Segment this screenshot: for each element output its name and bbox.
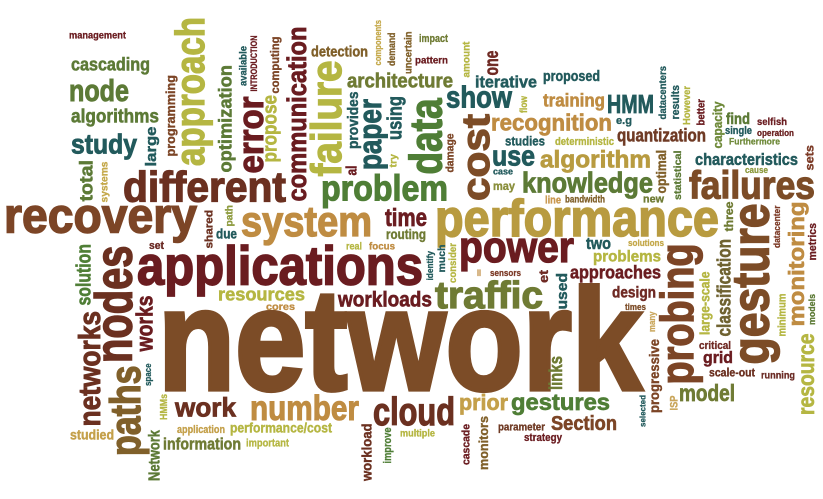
word: monitors: monitors	[476, 416, 491, 470]
word: studies: studies	[505, 134, 545, 148]
word: works: works	[132, 295, 158, 352]
word: single: single	[725, 125, 752, 137]
word: power: power	[459, 223, 574, 272]
word: optimization: optimization	[216, 65, 236, 172]
word: iterative: iterative	[475, 72, 537, 92]
word: solutions: solutions	[628, 238, 664, 249]
word: datacenters: datacenters	[657, 66, 669, 120]
word: amount: amount	[460, 41, 472, 78]
word: much: much	[437, 245, 448, 272]
word: total: total	[76, 160, 96, 202]
word: Section: Section	[551, 413, 617, 435]
word: management: management	[69, 30, 127, 42]
word: available: available	[238, 46, 250, 86]
word: selected: selected	[638, 395, 648, 427]
word: network: network	[158, 260, 643, 420]
word: metrics: metrics	[807, 223, 819, 260]
word: applications: applications	[137, 234, 423, 296]
word: workload: workload	[358, 423, 374, 482]
word: strategy: strategy	[524, 432, 563, 444]
word: training: training	[543, 90, 605, 110]
word: classification: classification	[714, 239, 736, 336]
word: recognition: recognition	[491, 110, 612, 136]
word: studied: studied	[70, 426, 114, 442]
word: cascade: cascade	[460, 424, 472, 465]
word: grid: grid	[703, 348, 733, 367]
word: study: study	[71, 128, 137, 160]
word: one: one	[482, 50, 503, 76]
word: datacenter: datacenter	[772, 205, 782, 248]
word: performance/cost: performance/cost	[230, 420, 332, 436]
word: workloads: workloads	[337, 288, 432, 312]
word: proposed: proposed	[543, 68, 600, 85]
word: large: large	[143, 126, 160, 166]
word: real: real	[346, 242, 362, 252]
word: al: al	[344, 166, 360, 176]
word: resources: resources	[218, 284, 305, 304]
word: traffic: traffic	[435, 275, 543, 317]
word: new: new	[643, 194, 664, 206]
word: gesture: gesture	[722, 204, 780, 364]
word: performance: performance	[435, 190, 719, 248]
word: different: different	[123, 164, 286, 212]
word: running: running	[761, 370, 795, 382]
word: progressive: progressive	[646, 339, 662, 413]
word: Furthermore: Furthermore	[729, 136, 780, 148]
word: focus: focus	[369, 242, 395, 252]
word: sets: sets	[802, 145, 816, 170]
word: consider: consider	[447, 243, 459, 283]
word: large-scale: large-scale	[696, 271, 712, 335]
word: flow: flow	[519, 96, 530, 113]
word: many: many	[647, 312, 657, 332]
word: gestures: gestures	[511, 389, 610, 415]
word: recovery: recovery	[4, 190, 197, 244]
word: results: results	[670, 85, 682, 120]
word: operation: operation	[757, 128, 794, 139]
word: may: may	[493, 179, 515, 193]
word: problems: problems	[593, 248, 661, 266]
word: computing: computing	[268, 36, 282, 94]
word: However: However	[681, 86, 693, 125]
word: critical: critical	[699, 340, 731, 352]
word: networks: networks	[72, 311, 107, 426]
word: knowledge: knowledge	[522, 168, 653, 200]
word: programming: programming	[163, 75, 178, 156]
word: damage: damage	[444, 134, 456, 172]
word: node: node	[69, 73, 129, 108]
word: detection: detection	[311, 44, 368, 60]
word: cloud: cloud	[373, 391, 455, 434]
word: uncertain: uncertain	[404, 32, 414, 74]
word: capacity: capacity	[710, 101, 725, 148]
word: set: set	[149, 240, 164, 252]
word: bandwidth: bandwidth	[565, 194, 605, 206]
word: cost: cost	[455, 114, 498, 201]
word: shared: shared	[204, 210, 216, 248]
word: space: space	[143, 364, 153, 386]
word: error: error	[230, 96, 271, 174]
word: impact: impact	[419, 33, 448, 45]
word: HMM: HMM	[607, 89, 654, 119]
word: nodes: nodes	[86, 246, 144, 363]
word: better: better	[696, 98, 708, 126]
word: quantization: quantization	[617, 126, 706, 146]
word: path: path	[224, 205, 236, 226]
word: important: important	[246, 438, 289, 450]
word: show: show	[446, 80, 513, 114]
word: parameter: parameter	[498, 422, 546, 434]
word: system: system	[241, 198, 372, 246]
word: resource: resource	[793, 334, 819, 415]
word: algorithms: algorithms	[71, 106, 159, 128]
word: cascading: cascading	[71, 54, 150, 74]
word: use: use	[492, 140, 535, 172]
word: work: work	[174, 392, 237, 422]
word: multiple: multiple	[400, 428, 435, 440]
word: et: et	[536, 269, 551, 283]
word: scale-out: scale-out	[709, 366, 755, 380]
word: three: three	[722, 201, 736, 232]
word: case: case	[493, 166, 513, 178]
word: number: number	[250, 389, 359, 428]
word: monitoring: monitoring	[784, 202, 809, 326]
word: components: components	[373, 20, 383, 66]
word: provides: provides	[345, 92, 362, 149]
word: optimal: optimal	[653, 150, 669, 194]
word: algorithm: algorithm	[540, 146, 651, 174]
word: INTRODUCTION: INTRODUCTION	[249, 36, 259, 92]
word: routing: routing	[386, 226, 426, 242]
word: using: using	[384, 96, 406, 140]
word: demand: demand	[387, 32, 398, 66]
word: cores: cores	[266, 302, 295, 313]
word: ll: ll	[477, 268, 481, 278]
word: application: application	[177, 424, 225, 436]
word: information: information	[163, 434, 241, 454]
word: minimum: minimum	[776, 293, 788, 336]
word: sensors: sensors	[490, 268, 521, 279]
word: paths: paths	[102, 366, 150, 456]
word: Network: Network	[146, 430, 164, 481]
word: approaches: approaches	[570, 262, 661, 282]
word: models: models	[807, 294, 818, 325]
word: pattern: pattern	[415, 56, 448, 66]
word: find: find	[726, 111, 750, 128]
word: line: line	[545, 194, 561, 206]
word: links: links	[546, 356, 566, 390]
word: cause: cause	[745, 165, 768, 175]
word: times: times	[625, 302, 646, 313]
word: prior: prior	[459, 390, 508, 415]
word: two: two	[586, 234, 611, 253]
word: problem: problem	[321, 168, 448, 208]
word: model: model	[679, 380, 735, 406]
word: data: data	[400, 98, 452, 174]
word: identify: identify	[425, 251, 435, 280]
word: design: design	[612, 284, 656, 302]
word: architecture: architecture	[347, 70, 453, 92]
word: probing: probing	[651, 244, 703, 384]
word: deterministic: deterministic	[555, 136, 614, 148]
word: try: try	[388, 154, 400, 168]
word: paper: paper	[352, 99, 388, 170]
word: failure: failure	[303, 60, 351, 176]
word: systems: systems	[98, 161, 110, 202]
word: improve: improve	[382, 428, 394, 464]
word: selfish: selfish	[757, 117, 787, 128]
word: ISP: ISP	[668, 396, 680, 410]
word: solution: solution	[74, 244, 96, 306]
word: statistical: statistical	[672, 150, 684, 200]
word: used: used	[554, 273, 571, 310]
word: time: time	[385, 204, 427, 232]
word: communication: communication	[282, 26, 312, 202]
word: HMMs: HMMs	[158, 394, 170, 420]
word: due: due	[216, 226, 237, 242]
word: propose: propose	[260, 95, 282, 162]
word: characteristics: characteristics	[695, 150, 798, 169]
word: e.g: e.g	[616, 115, 632, 127]
